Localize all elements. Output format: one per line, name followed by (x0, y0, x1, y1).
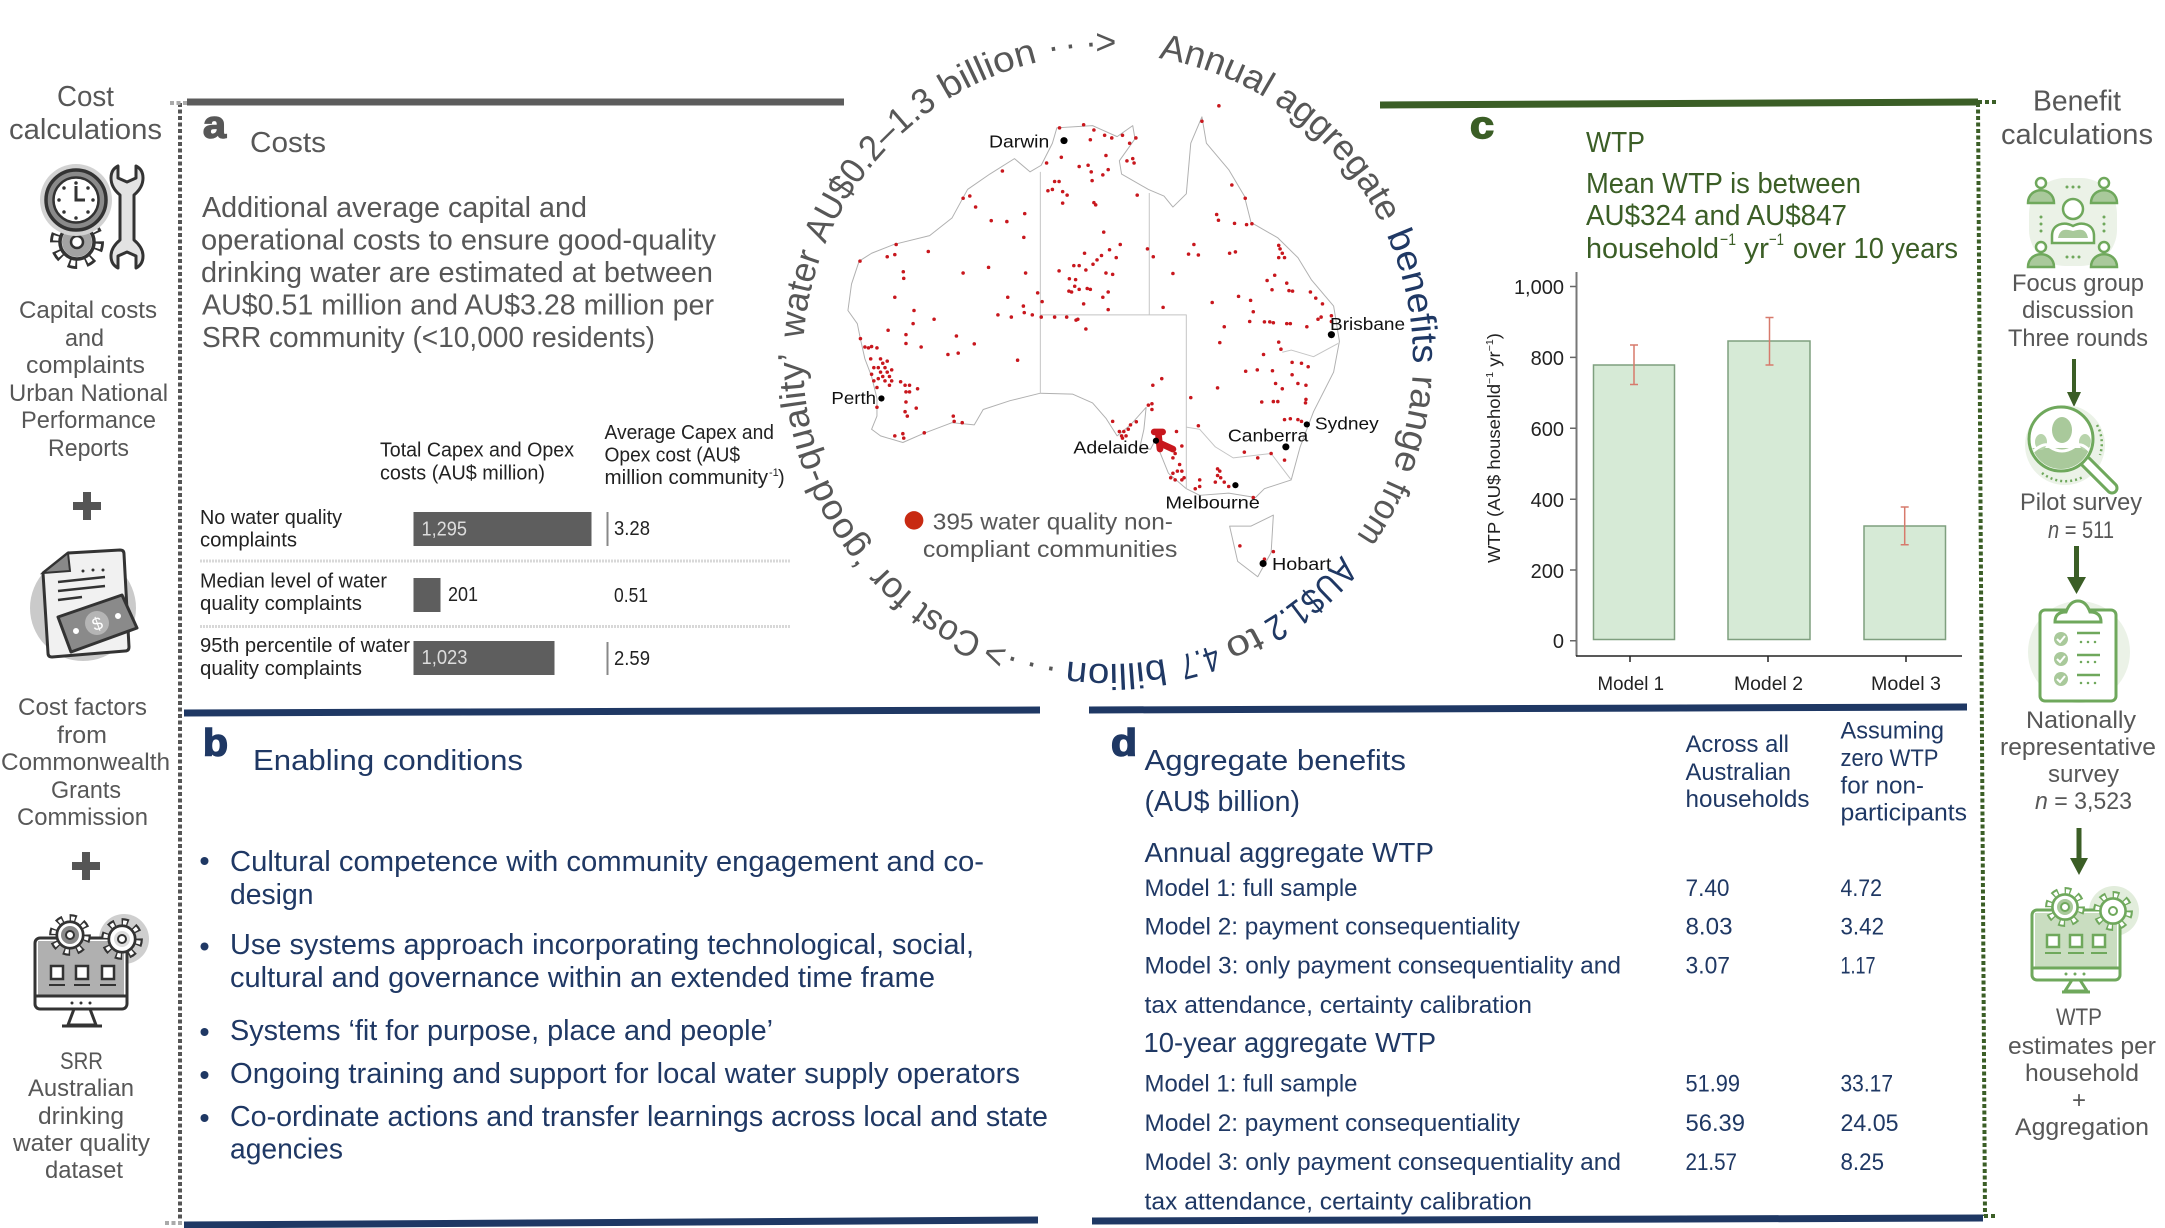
text: cost factors source: Grants (51, 777, 121, 804)
panel d heading (1144, 745, 1406, 818)
WTP summary: AU$324 and AU$847 (1586, 200, 1847, 232)
panel b letter: b (203, 722, 228, 764)
text: capital costs source: Performance (21, 407, 156, 434)
column header: average cost: million community (604, 467, 768, 489)
circular text: annual aggregate benefits: range (1394, 378, 1432, 471)
circular text: annual aggregate benefits: aggregate (1276, 90, 1395, 220)
costs description: SRR community (<10,000 residents) (202, 322, 655, 354)
chart axes (1570, 272, 1962, 662)
column header: zero WTP for non-participants: Assuming (1840, 718, 1944, 744)
row: median complaints (200, 570, 648, 615)
icon: plus (72, 852, 100, 880)
text: capital costs source: and (65, 325, 104, 352)
y axis labels: 200 (1531, 561, 1564, 583)
table: 10-year aggregate WTP: 10-year aggregate WTP (1144, 1027, 1436, 1058)
text: national survey: representative (2000, 734, 2156, 761)
column header: across all households: Australian (1686, 759, 1791, 786)
table: 10-year aggregate WTP: 51.99 (1686, 1070, 1740, 1098)
table: 10-year aggregate WTP: 56.39 (1686, 1110, 1745, 1137)
heading: benefit calculations (2001, 86, 2153, 151)
city labels: Melbourne (1165, 493, 1260, 512)
circular text: cost for good-quality water: for (869, 570, 912, 610)
bullet list: Systems ‘fit for purpose, place and people’ (230, 1015, 773, 1047)
panel d rules (1089, 707, 1983, 1221)
table: 10-year aggregate WTP: 21.57 (1686, 1149, 1737, 1176)
circular text: cost for good-quality water: ‘good-quality’ (778, 356, 871, 568)
column header: across all households (1686, 731, 1810, 813)
table: 10-year aggregate WTP: Model 2: payment consequentiality (1144, 1110, 1521, 1137)
text: focus group discussion (2008, 270, 2148, 352)
table: annual aggregate WTP (1144, 837, 1884, 1019)
circular text: annual aggregate benefits: to (1228, 628, 1264, 656)
bullet list: Cultural competence with community engagement and co- (230, 846, 984, 878)
column header: zero WTP for non-participants: zero WTP (1840, 745, 1938, 772)
circular text: annual aggregate benefits (986, 36, 1438, 690)
circular text: annual aggregate benefits: benefits (1388, 227, 1438, 362)
column header: average cost: ) (778, 467, 785, 489)
city labels: Hobart (1272, 554, 1332, 574)
icon: focus group (2028, 178, 2117, 267)
y axis labels: 1,000 (1514, 277, 1564, 299)
panel a rule (187, 98, 844, 106)
table: annual aggregate WTP: Model 1: full sample (1144, 875, 1358, 902)
y axis title: −1 (1485, 339, 1496, 351)
right column: benefit calculations (2000, 86, 2156, 1141)
circular text: cost for good-quality water (778, 33, 1115, 656)
bullet list: agencies (230, 1134, 343, 1166)
text: cost factors source (1, 694, 170, 831)
bullet list: cultural and governance within an extended time frame (230, 962, 935, 994)
panel b heading: Enabling conditions (253, 745, 523, 777)
central map of Australia (831, 106, 1405, 577)
text: SRR dataset: Australian (28, 1075, 134, 1102)
icon: computer with gears (35, 914, 149, 1026)
table: annual aggregate WTP: 1.17 (1840, 952, 1876, 980)
table: annual aggregate WTP: 3.07 (1686, 952, 1730, 980)
circular text: annual aggregate benefits: from (1358, 480, 1410, 544)
panel b rules (184, 710, 1040, 1225)
panel b: enabling conditions (184, 710, 1048, 1225)
bar chart: WTP by model (1484, 272, 1962, 695)
table: 10-year aggregate WTP: 33.17 (1840, 1070, 1893, 1098)
icon: clipboard checklist (2028, 601, 2130, 703)
circular text: cost for good-quality water: · (1089, 42, 1093, 47)
row: median complaints: Median level of water (200, 570, 387, 592)
costs description (201, 192, 716, 354)
table: 10-year aggregate WTP: 24.05 (1840, 1110, 1898, 1137)
column header: total costs: Total Capex and Opex (380, 440, 574, 462)
row: 95th percentile complaints: quality complaints (200, 658, 362, 680)
circular text: annual aggregate benefits: 4.7 (1184, 648, 1217, 680)
y axis labels (1514, 277, 1564, 653)
heading: benefit calculations: Benefit (2033, 86, 2121, 118)
costs description: drinking water are estimated at between (201, 257, 713, 289)
circular text: cost for good-quality water: > (1097, 33, 1115, 52)
row: no water quality complaints: No water quality (200, 507, 342, 529)
y axis labels: 600 (1531, 419, 1564, 441)
costs description: operational costs to ensure good-quality (201, 224, 716, 256)
text: cost factors source: Commission (17, 804, 148, 831)
circular text: annual aggregate benefits: · (1030, 662, 1034, 667)
table: 10-year aggregate WTP: tax attendance, certainty calibration (1144, 1188, 1532, 1216)
panel c rule (1380, 102, 1978, 105)
WTP summary: −1 (1720, 230, 1736, 249)
text: pilot survey: n = 511 (2048, 517, 2114, 544)
text: focus group discussion: Focus group (2012, 270, 2144, 297)
y axis title: ) (1484, 333, 1504, 339)
WTP summary: over 10 years (1793, 233, 1958, 265)
table: annual aggregate WTP: Model 2: payment consequentiality (1144, 914, 1521, 940)
text: SRR dataset: water quality (12, 1130, 150, 1157)
row: median complaints: 201 (448, 584, 478, 606)
text: SRR dataset (12, 1048, 150, 1184)
circular text: cost for good-quality water: · (1068, 44, 1072, 49)
dotted frame: cost side (165, 103, 187, 1223)
text: cost factors source: Cost factors (18, 694, 147, 721)
heading: cost calculations: Cost (57, 81, 114, 113)
panel a letter: a (203, 104, 227, 146)
text: national survey: survey (2048, 761, 2119, 788)
panel c letter: c (1470, 105, 1494, 147)
table: annual aggregate WTP: 7.40 (1686, 875, 1730, 902)
city labels: Sydney (1315, 413, 1379, 433)
column header: zero WTP for non-participants (1840, 718, 1967, 826)
text: cost factors source: from (57, 722, 107, 749)
city labels (831, 132, 1405, 574)
bullet list: design (230, 879, 314, 911)
icon: green computer with gears (2032, 886, 2139, 992)
table: annual aggregate WTP: 8.03 (1686, 914, 1732, 940)
costs description: AU$0.51 million and AU$3.28 million per (202, 290, 714, 322)
bullet list (200, 846, 1048, 1166)
column header: zero WTP for non-participants: for non- (1840, 772, 1924, 800)
bullet list: Ongoing training and support for local water supply operators (230, 1058, 1020, 1090)
left column: cost calculations (1, 81, 170, 1184)
text: national survey: n = 3,523 (2035, 788, 2132, 815)
circular text: cost for good-quality water: AU$0.2–1.3 (806, 89, 934, 244)
row: no water quality complaints (200, 507, 650, 552)
table: 10-year aggregate WTP (1144, 1027, 1898, 1216)
heading: cost calculations (9, 81, 162, 146)
icon: clock, gear and wrench (40, 164, 143, 268)
column header: across all households: Across all (1686, 731, 1789, 758)
column header: average cost (604, 422, 785, 489)
x axis labels: Model 2 (1734, 674, 1803, 695)
text: SRR dataset: dataset (45, 1157, 123, 1184)
circular text: annual aggregate benefits: · (1010, 656, 1014, 662)
table: annual aggregate WTP: Annual aggregate WTP (1144, 837, 1434, 868)
text: WTP estimates and aggregation: Aggregation (2015, 1114, 2149, 1141)
arrow: to pilot survey (2067, 359, 2081, 407)
map legend: compliant communities (923, 536, 1177, 562)
y axis title: WTP (AU$ household (1484, 394, 1504, 563)
city labels: Darwin (989, 132, 1049, 152)
WTP summary: household (1586, 233, 1719, 265)
heading: cost calculations: calculations (9, 114, 162, 146)
column header: average cost: Opex cost (AU$ (604, 444, 740, 466)
table: annual aggregate WTP: 3.42 (1840, 914, 1884, 940)
WTP summary: yr (1744, 233, 1769, 265)
panel d heading: Aggregate benefits (1144, 745, 1406, 777)
text: national survey (2000, 707, 2156, 815)
text: SRR dataset: drinking (38, 1103, 124, 1130)
circular text: annual aggregate benefits: > (986, 649, 1006, 666)
panel d letter: d (1111, 722, 1137, 764)
text: WTP estimates and aggregation: estimates per (2008, 1033, 2156, 1060)
text: WTP estimates and aggregation: + (2072, 1087, 2086, 1114)
row: 95th percentile complaints (200, 635, 650, 680)
map legend (905, 509, 1177, 562)
WTP summary: −1 (1769, 230, 1784, 249)
column header: total costs: costs (AU$ million) (380, 462, 545, 484)
text: pilot survey: Pilot survey (2020, 489, 2142, 516)
text: WTP estimates and aggregation (2008, 1004, 2156, 1141)
table: annual aggregate WTP: 4.72 (1840, 875, 1882, 902)
text: capital costs source (9, 297, 168, 462)
x axis labels: Model 3 (1871, 674, 1941, 695)
text: WTP estimates and aggregation: WTP (2056, 1004, 2102, 1031)
bar: model 1 (1594, 345, 1674, 640)
bullet list: Use systems approach incorporating technological, social, (230, 929, 974, 961)
y axis title: −1 (1485, 371, 1496, 384)
column header: average cost: Average Capex and (604, 422, 774, 444)
city markers (878, 137, 1335, 567)
text: pilot survey (2020, 489, 2142, 544)
circular text: annual aggregate benefits: AU$1.2 (1264, 555, 1354, 640)
y axis labels: 400 (1531, 490, 1564, 512)
arrow: to national survey (2067, 546, 2086, 594)
text: capital costs source: complaints (26, 352, 145, 379)
bar: model 3 (1864, 507, 1946, 640)
row: 95th percentile complaints: 95th percentile of water (200, 635, 410, 657)
panel a: costs (187, 102, 844, 680)
dotted frame: benefit side (1978, 102, 1996, 1216)
heading: benefit calculations: calculations (2001, 119, 2153, 151)
row: median complaints: 0.51 (614, 585, 648, 607)
text: capital costs source: Capital costs (19, 297, 157, 324)
icon: document with banknote: $ (89, 613, 105, 635)
text: national survey: Nationally (2026, 707, 2136, 734)
city labels: Perth (831, 388, 876, 408)
x axis labels: Model 1 (1598, 674, 1664, 695)
column header: across all households: households (1686, 786, 1810, 813)
circular text: annual aggregate benefits: · (1048, 666, 1053, 671)
costs description: Additional average capital and (202, 192, 587, 224)
text: cost factors source: Commonwealth (1, 749, 170, 776)
row: no water quality complaints: 1,295 (422, 518, 467, 540)
WTP summary: Mean WTP is between (1586, 168, 1861, 200)
row: no water quality complaints: 3.28 (614, 518, 650, 540)
text: capital costs source: Reports (48, 435, 129, 462)
row: median complaints: quality complaints (200, 593, 362, 615)
text: capital costs source: Urban National (9, 380, 168, 407)
panel d heading: (AU$ billion) (1144, 786, 1300, 818)
icon: document with banknote (30, 550, 137, 661)
row: no water quality complaints: complaints (200, 530, 297, 552)
panel c heading: WTP (1586, 127, 1645, 159)
panel d: aggregate benefits (1089, 707, 1983, 1221)
icon: magnifier with people (2025, 405, 2112, 488)
table: 10-year aggregate WTP: Model 1: full sample (1144, 1070, 1358, 1098)
map outline and state borders (848, 117, 1339, 577)
circular text: cost for good-quality water: water (784, 249, 820, 336)
map legend: 395 water quality non- (933, 509, 1173, 535)
column header: zero WTP for non-participants: participants (1840, 800, 1967, 826)
table: annual aggregate WTP: tax attendance, certainty calibration (1144, 992, 1532, 1019)
row: 95th percentile complaints: 1,023 (422, 647, 468, 669)
table: 10-year aggregate WTP: Model 3: only payment consequentiality and (1144, 1149, 1621, 1176)
WTP summary (1586, 168, 1958, 265)
circular text: annual aggregate benefits: Annual (1158, 36, 1276, 96)
text: WTP estimates and aggregation: household (2025, 1060, 2139, 1087)
column header: average cost: -1 (769, 467, 779, 479)
bar: model 2 (1728, 318, 1810, 640)
text: focus group discussion: discussion (2022, 297, 2134, 324)
column header: total costs (380, 440, 574, 484)
city labels: Canberra (1228, 426, 1309, 446)
x axis labels (1598, 674, 1941, 695)
y axis labels: 800 (1531, 348, 1564, 370)
table: 10-year aggregate WTP: 8.25 (1840, 1149, 1884, 1176)
y axis title: yr (1484, 351, 1504, 372)
row: 95th percentile complaints: 2.59 (614, 648, 650, 670)
panel c: WTP (1380, 102, 1978, 695)
city labels: Brisbane (1330, 314, 1405, 334)
panel a heading: Costs (250, 127, 326, 159)
city labels: Adelaide (1073, 438, 1149, 457)
circular text: cost for good-quality water: Cost (912, 602, 978, 656)
icon: plus (73, 492, 101, 520)
bullet list: Co-ordinate actions and transfer learnings across local and state (230, 1101, 1048, 1133)
y axis labels: 0 (1553, 631, 1564, 653)
text: SRR dataset: SRR (60, 1048, 103, 1075)
circular text: cost for good-quality water: · (1052, 46, 1056, 52)
text: focus group discussion: Three rounds (2008, 325, 2148, 352)
circular text: annual aggregate benefits: billion (1068, 659, 1166, 690)
red dots: non-compliant communities (860, 106, 1331, 559)
arrow: to WTP estimates (2070, 828, 2088, 875)
circular text: cost for good-quality water: billion (936, 45, 1036, 98)
table: annual aggregate WTP: Model 3: only payment consequentiality and (1144, 952, 1621, 980)
